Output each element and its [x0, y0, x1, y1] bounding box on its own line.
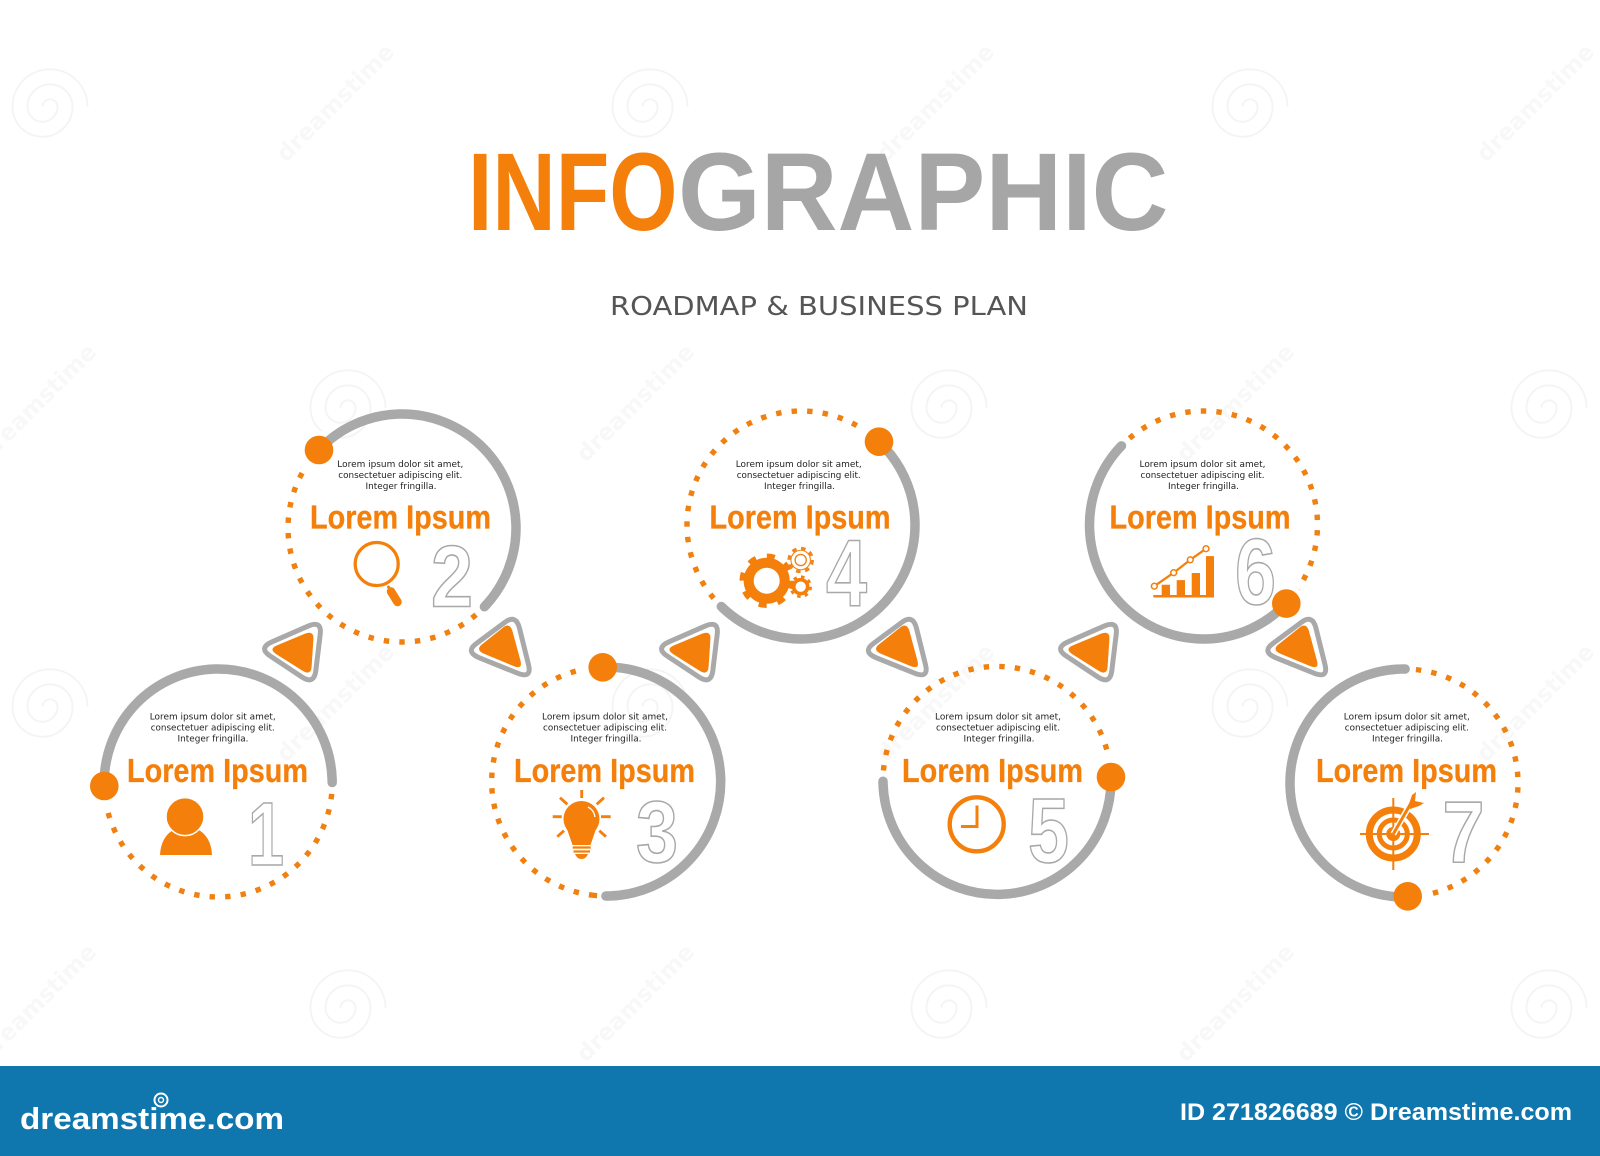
description 4: consectetuer adipiscing elit. [737, 470, 861, 481]
icon: person [160, 798, 212, 855]
arrow: step 5 to 6 [1061, 624, 1116, 680]
icon: light bulb [553, 790, 611, 859]
footer bar [0, 1066, 1600, 1156]
icon: gears [742, 548, 812, 605]
description 2: Integer fringilla. [366, 481, 436, 492]
description 3: consectetuer adipiscing elit. [543, 723, 667, 734]
description 7: Lorem ipsum dolor sit amet, [1344, 712, 1470, 723]
description 6: Integer fringilla. [1168, 481, 1239, 492]
heading 4: Lorem Ipsum [710, 500, 890, 537]
panel: step 1 [85, 659, 343, 907]
panel: step 5 [873, 657, 1130, 904]
description 1: consectetuer adipiscing elit. [151, 723, 275, 734]
description 1: Lorem ipsum dolor sit amet, [150, 712, 276, 723]
description 2: consectetuer adipiscing elit. [338, 470, 462, 481]
description 4: Lorem ipsum dolor sit amet, [736, 459, 862, 470]
footer logo: dreamstime.com [20, 1101, 284, 1136]
arrow: step 1 to 2 [265, 624, 320, 680]
arrow: step 2 to 3 [471, 619, 529, 675]
number 3: 3 [636, 784, 678, 881]
panel: step 6 [1042, 364, 1365, 686]
number 2: 2 [431, 528, 473, 626]
heading 2: Lorem Ipsum [310, 500, 491, 537]
watermark pattern: dreamstime [272, 639, 400, 767]
number 6: 6 [1235, 519, 1276, 624]
description 6: consectetuer adipiscing elit. [1140, 470, 1264, 481]
panel: step 3 [480, 648, 732, 907]
heading 6: Lorem Ipsum [1110, 500, 1290, 537]
description 4: Integer fringilla. [764, 481, 835, 492]
subtitle: ROADMAP & BUSINESS PLAN [610, 292, 1028, 322]
footer credit: ID 271826689 © Dreamstime.com [1180, 1099, 1572, 1126]
panel: step 7 [1279, 658, 1529, 915]
heading 3: Lorem Ipsum [514, 753, 695, 790]
watermark pattern: dreamstime [1172, 939, 1300, 1067]
number 4: 4 [826, 521, 867, 627]
number 5: 5 [1028, 780, 1069, 882]
arrow: step 4 to 5 [868, 619, 926, 675]
number 1: 1 [248, 785, 284, 885]
watermark pattern: dreamstime [572, 939, 700, 1067]
heading 5: Lorem Ipsum [902, 753, 1083, 790]
heading 1: Lorem Ipsum [127, 753, 308, 790]
arrow: step 6 to 7 [1268, 619, 1326, 675]
watermark pattern: dreamstime [1472, 39, 1600, 167]
description 3: Lorem ipsum dolor sit amet, [542, 712, 668, 723]
description 7: consectetuer adipiscing elit. [1345, 723, 1469, 734]
description 2: Lorem ipsum dolor sit amet, [337, 459, 463, 470]
description 7: Integer fringilla. [1372, 734, 1443, 745]
number 7: 7 [1442, 784, 1484, 881]
arrow: step 3 to 4 [662, 624, 717, 680]
icon: growth chart [1151, 546, 1214, 598]
watermark pattern: dreamstime [872, 639, 1000, 767]
title: INFO [468, 131, 678, 254]
watermark pattern: dreamstime [1172, 339, 1300, 467]
icon: magnifier [355, 542, 398, 602]
description 3: Integer fringilla. [570, 734, 642, 745]
title: GRAPHIC [678, 131, 1168, 254]
title [468, 131, 1168, 254]
description 5: consectetuer adipiscing elit. [936, 723, 1060, 734]
description 1: Integer fringilla. [178, 734, 248, 745]
panel: step 2 [241, 367, 563, 689]
description 5: Integer fringilla. [964, 734, 1034, 745]
heading 7: Lorem Ipsum [1316, 753, 1497, 790]
watermark pattern: dreamstime [572, 339, 700, 467]
icon: target [1360, 792, 1429, 870]
watermark pattern: dreamstime [272, 39, 400, 167]
watermark pattern: dreamstime [1472, 639, 1600, 767]
description 5: Lorem ipsum dolor sit amet, [935, 712, 1061, 723]
watermark pattern: dreamstime [872, 39, 1000, 167]
description 6: Lorem ipsum dolor sit amet, [1140, 459, 1266, 470]
panel: step 4 [640, 364, 962, 686]
icon: clock [950, 797, 1004, 851]
